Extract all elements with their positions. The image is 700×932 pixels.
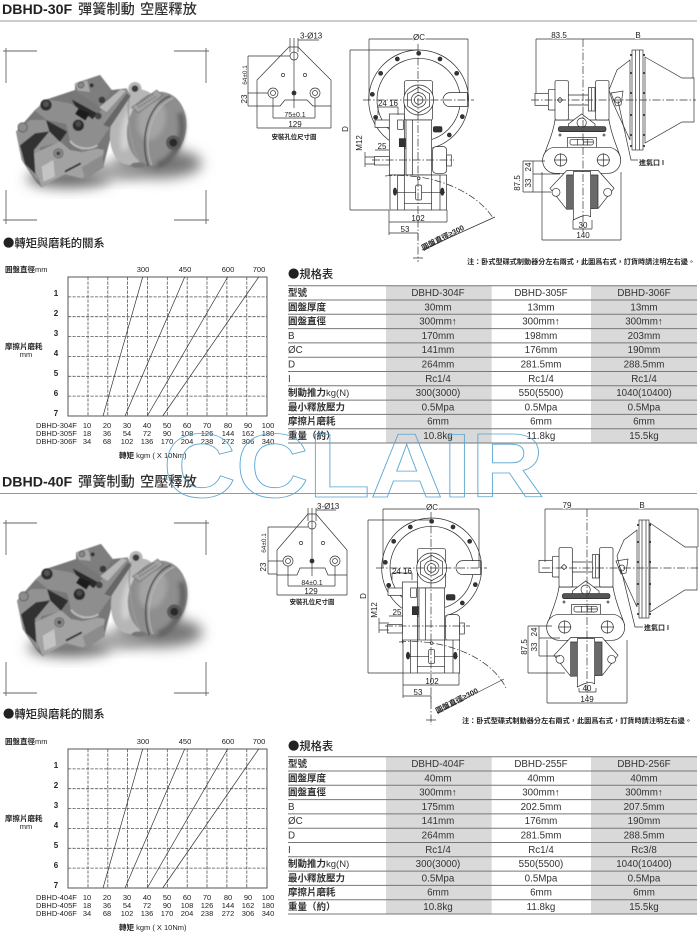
table: spec 30F: Rc1/4 [425,374,451,385]
table: spec 40F: Rc1/4 [425,845,451,856]
chart: torque vs wear 30F: 3 [54,329,59,338]
table: spec 40F: 202.5mm [521,802,561,813]
chart: torque vs wear 30F: DBHD-306F [36,437,77,446]
chart: torque vs wear 30F: 68 [103,437,111,446]
chart: torque vs wear 30F: 7 [54,409,59,418]
table: spec 30F: 10.8kg [423,431,453,442]
chart: torque vs wear 40F: 轉矩 kgm ( X 10Nm) [119,922,187,932]
table: spec 40F: 0.5Mpa [628,873,661,884]
chart: torque vs wear 30F: 238 [201,437,213,446]
table: spec 40F: 300mm↑ [419,788,457,799]
photo: DBHD-40F brake [3,520,209,696]
diagram: side view 40F: B [639,501,645,510]
section title: DBHD-30F: 空壓釋放 [140,1,197,18]
diagram: front view 30F [341,33,495,262]
chart: torque vs wear 40F: 20 [103,893,111,902]
table: spec 40F: 300mm↑ [625,788,663,799]
chart: torque vs wear 40F: 700 [253,737,265,746]
table: spec 30F: 300mm↑ [625,317,663,328]
chart: torque vs wear 30F: 34 [83,437,91,446]
table: spec 30F: 300mm↑ [522,317,560,328]
chart: torque vs wear 40F: 340 [262,909,274,918]
section title: DBHD-30F [0,1,697,21]
table: spec 40F: 制動推力kg(N) [288,858,349,870]
chart: torque vs wear 30F: 4 [54,349,59,358]
chart: torque vs wear 30F: 圓盤直徑mm [5,264,48,274]
chart: torque vs wear 40F: 108 [181,901,193,910]
diagram: front view 30F: ØC [413,33,425,42]
table: spec 30F: 圓盤直徑 [288,316,327,328]
diagram: mounting hole plate 30F: 64±0.1 [242,65,249,85]
table: spec 40F: 15.5kg [629,902,659,913]
table: spec 40F: 10.8kg [423,902,453,913]
table: spec 30F: 30mm [424,302,452,313]
chart: torque vs wear 40F: 450 [179,737,191,746]
table: spec 40F: 190mm [628,816,660,827]
chart: torque vs wear 40F: 18 [83,901,91,910]
diagram: mounting hole plate 30F: 75±0.1 [284,112,306,119]
table: spec 40F [288,757,697,914]
table: spec 30F: 6mm [427,417,449,428]
section title: DBHD-40F [0,474,697,494]
chart: torque vs wear 30F: 轉矩 kgm ( X 10Nm) [119,450,187,460]
chart: torque vs wear 30F: 5 [54,369,59,378]
table: spec 30F: 550(5500) [519,388,563,399]
chart: torque vs wear 30F: 30 [123,421,131,430]
section title: DBHD-30F: 彈簧制動 [78,1,135,18]
chart: torque vs wear 30F: 40 [143,421,151,430]
chart: torque vs wear 30F: 20 [103,421,111,430]
diagram: mounting hole plate 30F [240,32,331,141]
chart: torque vs wear 40F: 54 [123,901,131,910]
diagram: front view 30F: D [341,126,350,132]
chart: torque vs wear 30F: 36 [103,429,111,438]
table: spec 40F: 176mm [525,816,557,827]
chart: torque vs wear 40F: 100 [262,893,274,902]
table: spec 40F: B [288,802,295,813]
table: spec 30F: 圓盤厚度 [288,301,327,313]
chart: torque vs wear 30F: 600 [222,265,234,274]
chart: torque vs wear 30F: 60 [183,421,191,430]
chart: torque vs wear 40F: DBHD-406F [36,909,77,918]
chart: torque vs wear 30F: 70 [203,421,211,430]
section title: DBHD-40F: 空壓釋放 [140,474,197,490]
watermark: CCLAIR outline: CCLAIR [163,416,544,517]
diagram: front view 40F: M12 [370,602,379,618]
table: spec 40F: D [288,830,295,842]
table: spec 40F: 11.8kg [527,902,555,913]
table: spec 30F: 300mm↑ [419,317,457,328]
chart: torque vs wear 30F: 54 [123,429,131,438]
diagram: front view 30F: 102 [411,214,425,223]
chart: torque vs wear 40F: 36 [103,901,111,910]
diagram: mounting hole plate 40F: 3-Ø13 [317,502,340,511]
chart: torque vs wear 30F: 2 [54,309,59,318]
chart: torque vs wear 40F: 40 [143,893,151,902]
chart: torque vs wear 40F: 60 [183,893,191,902]
chart: torque vs wear 40F: 1 [54,761,59,770]
chart: torque vs wear 40F: 600 [222,737,234,746]
chart: torque vs wear 40F: 5 [54,841,59,850]
section title: DBHD-40F: 彈簧制動 [78,474,135,490]
diagram: side view 30F: 24 [524,162,533,171]
table: spec 30F: B [288,331,295,342]
table: spec 40F: DBHD-404F [411,759,465,770]
chart: torque vs wear 40F: 90 [244,893,252,902]
diagram: front view 30F: M12 [355,135,364,151]
heading: spec table 40F: ●規格表 [288,738,333,754]
chart: torque vs wear 40F: 162 [242,901,254,910]
chart: torque vs wear 40F: 50 [163,893,171,902]
diagram: front view 40F [359,503,506,725]
chart: torque vs wear 30F: 136 [141,437,153,446]
table: spec 30F: Rc1/4 [528,374,554,385]
table: spec 40F: 1040(10400) [616,859,672,870]
chart: torque vs wear 30F: 80 [224,421,232,430]
diagram: mounting hole plate 30F: 3-Ø13 [300,32,323,40]
diagram: side view 30F: 進氣口 I [639,158,664,167]
table: spec 40F: DBHD-255F [514,759,568,770]
chart: torque vs wear 40F: 80 [224,893,232,902]
heading: spec table 30F: ●規格表 [288,266,333,282]
table: spec 40F: 最小釋放壓力 [288,872,345,884]
table: spec 30F: 0.5Mpa [525,402,558,413]
table: spec 30F: 176mm [525,345,557,356]
chart: torque vs wear 30F: 306 [242,437,254,446]
table: spec 40F: 圓盤直徑 [288,787,327,799]
chart: torque vs wear 30F: 180 [262,429,274,438]
diagram: side view 30F: B [635,31,641,40]
chart: torque vs wear 30F: mm [20,350,32,359]
table: spec 40F: 141mm [422,816,454,827]
diagram: mounting hole plate 40F: 84±0.1 [301,580,323,587]
chart: torque vs wear 30F: 72 [143,429,151,438]
table: spec 30F: 190mm [628,345,660,356]
table: spec 30F: 15.5kg [629,431,659,442]
table: spec 40F: 207.5mm [624,802,664,813]
diagram: side view 40F: 79 [563,501,572,510]
table: spec 40F: 0.5Mpa [422,873,455,884]
chart: torque vs wear 40F: 6 [54,861,59,870]
chart: torque vs wear 40F: 72 [143,901,151,910]
chart: torque vs wear 30F: 300 [137,265,149,274]
chart: torque vs wear 30F: 50 [163,421,171,430]
table: spec 30F: I [288,374,291,385]
table: spec 30F: 重量（約） [288,430,336,442]
table: spec 40F: 550(5500) [519,859,563,870]
chart: torque vs wear 40F [5,736,274,932]
table: spec 30F: 141mm [422,345,454,356]
table: spec 40F: 175mm [422,802,454,813]
table: spec 40F: 300(3000) [416,859,460,870]
table: spec 40F: Rc3/8 [631,845,657,856]
note 40F: 注：卧式型碟式制動器分左右兩式，此圖爲右式，訂貨時請注明左右邊。 [462,716,692,725]
diagram: front view 40F: D [359,593,368,599]
chart: torque vs wear 30F: 144 [222,429,234,438]
chart: torque vs wear 40F: 2 [54,781,59,790]
diagram: side view 40F: 40 [583,684,592,693]
chart: torque vs wear 30F: 6 [54,389,59,398]
diagram: front view 30F: 53 [401,225,410,234]
diagram: mounting hole plate 30F: 129 [288,120,302,129]
chart: torque vs wear 40F: 圓盤直徑mm [5,736,48,746]
chart: torque vs wear 40F: 68 [103,909,111,918]
chart: torque vs wear 40F: 238 [201,909,213,918]
table: spec 40F: 300mm↑ [522,788,560,799]
diagram: front view 40F: 102 [425,677,439,686]
chart: torque vs wear 40F: 300 [137,737,149,746]
diagram: front view 40F: 24 16 [392,567,413,576]
section title: DBHD-30F: DBHD-30F [2,2,72,18]
table: spec 40F: 6mm [427,888,449,899]
chart: torque vs wear 30F: 18 [83,429,91,438]
diagram: front view 40F: ØC [426,503,438,512]
diagram: front view 40F: 圓盤直徑≥300 [434,685,480,715]
chart: torque vs wear 30F: 1 [54,289,59,298]
diagram: mounting hole plate 40F: 64±0.1 [261,533,268,553]
chart: torque vs wear 30F: 204 [181,437,193,446]
chart: torque vs wear 30F: 102 [121,437,133,446]
table: spec 40F: 型號 [288,758,308,770]
table: spec 40F: 40mm [630,773,658,784]
chart: torque vs wear 40F: 3 [54,801,59,810]
diagram: side view 40F: 進氣口 I [644,623,669,632]
chart: torque vs wear 30F: 摩擦片磨耗 [5,341,43,351]
chart: torque vs wear 30F: 272 [222,437,234,446]
chart: torque vs wear 40F: 34 [83,909,91,918]
table: spec 30F: 最小釋放壓力 [288,401,345,413]
table: spec 30F: 6mm [633,417,655,428]
diagram: side view 30F: 140 [576,231,590,240]
table: spec 30F: 13mm [630,302,658,313]
diagram: mounting hole plate 40F: 23 [259,562,268,571]
chart: torque vs wear 40F: 10 [83,893,91,902]
chart: torque vs wear 30F: 90 [244,421,252,430]
table: spec 40F: 重量（約） [288,901,336,913]
chart: torque vs wear 40F: 102 [121,909,133,918]
diagram: side view 30F: 30 [579,221,588,230]
table: spec 40F: 0.5Mpa [525,873,558,884]
table: spec 40F: ØC [288,816,303,827]
chart: torque vs wear 40F: 7 [54,881,59,890]
table: spec 40F: 264mm [422,830,454,842]
diagram: mounting hole plate 40F: 安裝孔位尺寸圖 [290,597,334,606]
table: spec 30F: 203mm [628,331,660,342]
table: spec 40F: 281.5mm [521,830,561,842]
table: spec 40F: 圓盤厚度 [288,772,327,784]
diagram: mounting hole plate 30F: 23 [240,94,249,103]
chart: torque vs wear 40F: 70 [203,893,211,902]
chart: torque vs wear 40F: 30 [123,893,131,902]
chart: torque vs wear 30F: 450 [179,265,191,274]
diagram: side view 30F: 83.5 [551,31,567,40]
table: spec 30F: 6mm [530,417,552,428]
chart: torque vs wear 30F: 90 [163,429,171,438]
table: spec 30F: 1040(10400) [616,388,672,399]
table: spec 30F: 型號 [288,287,308,299]
diagram: side view 40F [520,501,698,704]
chart: torque vs wear 40F: 90 [163,901,171,910]
table: spec 30F: DBHD-304F [411,288,465,299]
table: spec 40F: 6mm [530,888,552,899]
diagram: side view 40F: 24 [530,627,539,636]
table: spec 30F: 288.5mm [624,360,664,370]
chart: torque vs wear 40F: 4 [54,821,59,830]
chart: torque vs wear 30F [5,264,274,460]
chart: torque vs wear 40F: 272 [222,909,234,918]
chart: torque vs wear 30F: DBHD-305F [36,429,77,438]
table: spec 30F: ØC [288,345,303,356]
chart: torque vs wear 40F: 306 [242,909,254,918]
chart: torque vs wear 40F: mm [20,822,32,831]
table: spec 40F: 40mm [424,773,452,784]
diagram: mounting hole plate 40F [259,502,347,606]
chart: torque vs wear 30F: 126 [201,429,213,438]
table: spec 40F: DBHD-256F [617,759,671,770]
diagram: mounting hole plate 30F: 安裝孔位尺寸圖 [272,132,316,141]
diagram: side view 30F [513,31,696,240]
chart: torque vs wear 30F: 700 [253,265,265,274]
chart: torque vs wear 40F: 摩擦片磨耗 [5,813,43,823]
table: spec 40F: 40mm [527,773,555,784]
heading: torque and wear 30F: ●轉矩與磨耗的關系 [3,235,105,251]
chart: torque vs wear 30F: 340 [262,437,274,446]
table: spec 30F: 170mm [422,331,454,342]
diagram: side view 30F: 33 [524,178,533,187]
note 30F: 注：卧式型碟式制動器分左右兩式，此圖爲右式，訂貨時請注明左右邊。 [467,257,695,266]
chart: torque vs wear 40F: DBHD-405F [36,901,77,910]
chart: torque vs wear 40F: 204 [181,909,193,918]
heading: torque and wear 40F: ●轉矩與磨耗的關系 [3,706,105,722]
table: spec 30F [288,286,697,443]
table: spec 30F: D [288,360,295,370]
table: spec 40F: 6mm [633,888,655,899]
diagram: front view 40F: 53 [414,688,423,697]
table: spec 30F: 13mm [527,302,555,313]
chart: torque vs wear 30F: 170 [161,437,173,446]
chart: torque vs wear 40F: 144 [222,901,234,910]
table: spec 30F: DBHD-306F [617,288,671,299]
table: spec 30F: 281.5mm [521,360,561,370]
diagram: front view 30F: 24 16 [378,99,399,108]
table: spec 30F: 264mm [422,360,454,370]
chart: torque vs wear 40F: 126 [201,901,213,910]
table: spec 30F: 摩擦片磨耗 [288,416,336,428]
chart: torque vs wear 30F: 108 [181,429,193,438]
diagram: side view 40F: 87.5 [520,639,529,655]
table: spec 30F: 11.8kg [527,431,555,442]
table: spec 40F: Rc1/4 [528,845,554,856]
table: spec 30F: 0.5Mpa [422,402,455,413]
chart: torque vs wear 40F: 180 [262,901,274,910]
section title: DBHD-40F: DBHD-40F [2,474,72,490]
diagram: side view 40F: 33 [530,642,539,651]
table: spec 30F: 0.5Mpa [628,402,661,413]
chart: torque vs wear 40F: DBHD-404F [36,893,77,902]
table: spec 30F: DBHD-305F [514,288,568,299]
diagram: front view 30F: 圓盤直徑≥300 [420,222,466,252]
diagram: side view 30F: 87.5 [513,175,522,191]
table: spec 40F: 摩擦片磨耗 [288,887,336,899]
chart: torque vs wear 30F: 100 [262,421,274,430]
table: spec 30F: Rc1/4 [631,374,657,385]
diagram: front view 30F: 25 [378,142,387,151]
table: spec 40F: I [288,845,291,856]
table: spec 30F: 制動推力kg(N) [288,387,349,399]
chart: torque vs wear 40F: 136 [141,909,153,918]
diagram: front view 40F: 25 [393,608,402,617]
table: spec 30F: 300(3000) [416,388,460,399]
chart: torque vs wear 30F: 10 [83,421,91,430]
chart: torque vs wear 40F: 170 [161,909,173,918]
chart: torque vs wear 30F: DBHD-304F [36,421,77,430]
table: spec 30F: 198mm [525,331,557,342]
diagram: side view 40F: 149 [580,695,594,704]
photo: DBHD-30F brake [3,48,209,224]
diagram: mounting hole plate 40F: 129 [304,587,318,596]
table: spec 40F: 288.5mm [624,830,664,842]
chart: torque vs wear 30F: 162 [242,429,254,438]
